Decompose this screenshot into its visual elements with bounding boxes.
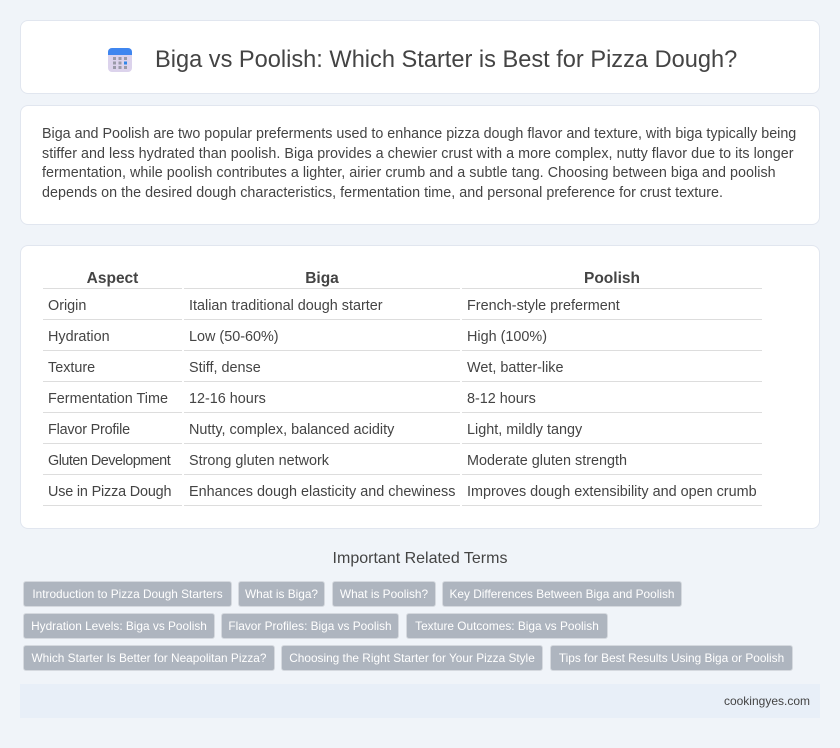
related terms tags [23, 581, 793, 671]
comparison table: Enhances dough elasticity and chewiness [189, 484, 455, 500]
related terms tags: Flavor Profiles: Biga vs Poolish [228, 619, 392, 633]
comparison table: Italian traditional dough starter [189, 298, 383, 314]
source credit: cookingyes.com [724, 694, 810, 708]
intro text: stiffer and less hydrated than poolish. Biga provides a chewier crust with a more complex, nutty flavor due to its longer [42, 146, 794, 162]
title: Biga vs Poolish: Which Starter is Best for Pizza Dough? [155, 47, 737, 73]
comparison table: Origin [48, 298, 86, 314]
related terms tags: What is Biga? [245, 587, 318, 601]
comparison table: Fermentation Time [48, 391, 168, 407]
comparison table: Nutty, complex, balanced acidity [189, 422, 394, 438]
panel: introduction [20, 105, 820, 225]
comparison table: Biga [305, 270, 339, 287]
comparison table: Flavor Profile [48, 422, 130, 438]
intro text: fermentation, while poolish contributes a lighter, airier crumb and a subtle tang. Choosing between biga and poolish [42, 165, 776, 181]
comparison table: Texture [48, 360, 95, 376]
intro text [42, 126, 796, 201]
comparison table: Light, mildly tangy [467, 422, 582, 438]
related terms tags: Which Starter Is Better for Neapolitan Pizza? [31, 651, 266, 665]
related terms tags: What is Poolish? [340, 587, 428, 601]
intro text: Biga and Poolish are two popular preferments used to enhance pizza dough flavor and texture, with biga typically being [42, 126, 796, 142]
comparison table: High (100%) [467, 329, 547, 345]
comparison table: Aspect [87, 270, 138, 287]
panel: header [20, 20, 820, 94]
comparison table: Stiff, dense [189, 360, 261, 376]
related terms tags: Hydration Levels: Biga vs Poolish [31, 619, 207, 633]
comparison table: Poolish [584, 270, 640, 287]
comparison table: 12-16 hours [189, 391, 266, 407]
comparison table: Use in Pizza Dough [48, 484, 171, 500]
icon: calendar [108, 48, 132, 72]
comparison table: Moderate gluten strength [467, 453, 627, 469]
panel: comparison table [20, 245, 820, 529]
comparison table [43, 270, 762, 506]
comparison table: French-style preferment [467, 298, 620, 314]
comparison table: Improves dough extensibility and open crumb [467, 484, 757, 500]
related terms tags: Tips for Best Results Using Biga or Poolish [559, 651, 784, 665]
comparison table: Hydration [48, 329, 110, 345]
related terms tags: Choosing the Right Starter for Your Pizza Style [289, 651, 535, 665]
related terms tags: Key Differences Between Biga and Poolish [450, 587, 674, 601]
comparison table: Gluten Development [48, 453, 170, 469]
comparison table: Low (50-60%) [189, 329, 279, 345]
comparison table: Wet, batter-like [467, 360, 564, 376]
related terms tags: Texture Outcomes: Biga vs Poolish [415, 619, 599, 633]
footer bar [20, 684, 820, 718]
intro text: depends on the desired dough characteristics, fermentation time, and personal preference for crust texture. [42, 185, 723, 201]
comparison table: Strong gluten network [189, 453, 329, 469]
related terms heading: Important Related Terms [333, 550, 507, 567]
comparison table: 8-12 hours [467, 391, 536, 407]
related terms tags: Introduction to Pizza Dough Starters [32, 587, 223, 601]
